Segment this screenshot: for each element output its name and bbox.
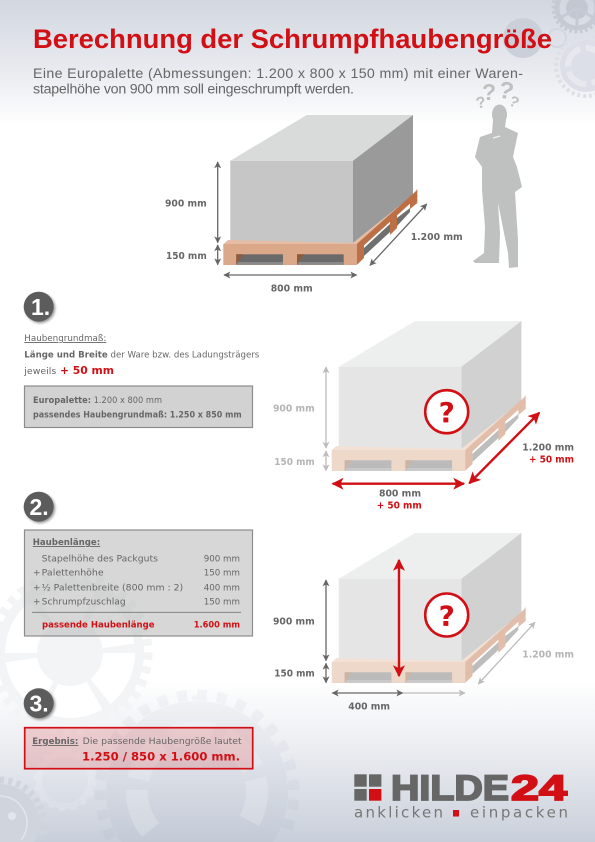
result row: passende Haubenlänge bbox=[42, 621, 154, 631]
dimension labels: step 1: 800 mm bbox=[379, 489, 421, 500]
step 1 text: + 50 mm bbox=[60, 364, 114, 377]
logo tagline bbox=[354, 803, 568, 821]
dimension arrows: overview bbox=[218, 162, 427, 275]
icon: question mark circle step 1 bbox=[425, 390, 468, 433]
dimension labels: step 1: + 50 mm bbox=[377, 501, 422, 512]
red height arrow: step 2 bbox=[398, 560, 400, 676]
background gears bottom left bbox=[0, 575, 294, 842]
step 2 calculation box bbox=[24, 530, 252, 636]
red arrows: step 1 bbox=[333, 413, 539, 484]
intro text bbox=[33, 66, 523, 98]
pallet illustration: step 2 (faded) bbox=[332, 533, 526, 683]
dimension labels: overview: 1.200 mm bbox=[411, 232, 463, 243]
calculation rows: 900 mm bbox=[204, 555, 240, 565]
pallet illustration: overview bbox=[223, 115, 417, 265]
dimension labels: overview: 900 mm bbox=[165, 199, 207, 210]
step 1 text: Länge und Breite der Ware bzw. des Ladungsträgers bbox=[24, 351, 260, 361]
result box: Ergebnis: bbox=[32, 737, 78, 747]
step badge 3: 3. bbox=[30, 690, 49, 716]
calculation rows: 400 mm bbox=[204, 584, 240, 594]
dimension arrows: step 2 bbox=[326, 580, 535, 693]
calculation rows: Palettenhöhe bbox=[42, 569, 104, 579]
icon: question mark circle step 1: ? bbox=[439, 396, 455, 429]
question marks: ? bbox=[475, 94, 487, 113]
question marks bbox=[475, 76, 522, 113]
dimension labels: step 2: 150 mm bbox=[274, 669, 315, 680]
calculation rows: ½ Palettenbreite (800 mm : 2) bbox=[42, 584, 183, 594]
icon: thinking man silhouette bbox=[473, 76, 522, 268]
question marks: ? bbox=[482, 79, 496, 105]
question marks: ? bbox=[496, 76, 516, 106]
result box: Die passende Haubengröße lautet bbox=[83, 737, 242, 747]
step 1 info box bbox=[24, 386, 252, 428]
logo mark bbox=[354, 774, 381, 801]
logo wordmark: HILDE bbox=[391, 769, 509, 808]
background gears top right bbox=[503, 0, 595, 96]
dimension labels: step 2: 1.200 mm bbox=[522, 650, 574, 661]
dimension labels: step 1: + 50 mm bbox=[529, 455, 574, 466]
box heading: Haubenlänge: bbox=[33, 538, 100, 548]
icon: question mark circle step 2: ? bbox=[439, 599, 455, 632]
dimension labels: step 2: 400 mm bbox=[348, 701, 390, 712]
calculation rows: + bbox=[33, 598, 41, 608]
dimension labels: step 2: 900 mm bbox=[273, 617, 315, 628]
calculation rows: + bbox=[33, 569, 41, 579]
logo wordmark bbox=[391, 769, 568, 808]
calculation rows: Schrumpfzuschlag bbox=[42, 598, 126, 608]
result box: 1.250 / 850 x 1.600 mm. bbox=[82, 749, 240, 763]
grey dimension arrows: step 1 bbox=[325, 367, 327, 471]
step 1 text: jeweils bbox=[23, 367, 57, 377]
calculation rows: 150 mm bbox=[204, 569, 240, 579]
logo tagline: anklicken bbox=[354, 803, 443, 821]
pallet illustration: step 1 (faded) bbox=[332, 321, 526, 471]
step badge 1: 1. bbox=[31, 294, 50, 320]
step 1 text bbox=[23, 334, 260, 377]
intro text: stapelhöhe von 900 mm soll eingeschrumpft werden. bbox=[33, 82, 354, 98]
dimension labels: step 1: 1.200 mm bbox=[522, 443, 574, 454]
result box bbox=[25, 728, 253, 769]
step badge 1 bbox=[24, 292, 54, 322]
question marks: ? bbox=[506, 93, 522, 112]
step badge 2 bbox=[24, 492, 54, 522]
dimension labels: overview: 800 mm bbox=[271, 284, 313, 295]
calculation rows bbox=[33, 555, 240, 608]
calculation rows: 150 mm bbox=[204, 598, 240, 608]
dimension labels: step 1 bbox=[273, 404, 574, 512]
logo wordmark: 24 bbox=[511, 769, 568, 808]
logo: HILDE24 bbox=[354, 769, 568, 821]
result row bbox=[42, 621, 240, 631]
calculation rows: Stapelhöhe des Packguts bbox=[42, 555, 158, 565]
dimension labels: step 1: 150 mm bbox=[274, 457, 315, 468]
intro text: Eine Europalette (Abmessungen: 1.200 x 800 x 150 mm) mit einer Waren- bbox=[33, 66, 523, 82]
step 1 text: Haubengrundmaß: bbox=[24, 334, 106, 344]
step badge 3 bbox=[24, 688, 54, 718]
dimension labels: step 1: 900 mm bbox=[273, 404, 315, 415]
result row: 1.600 mm bbox=[194, 621, 240, 631]
icon: question mark circle step 2 bbox=[425, 594, 468, 636]
title: Berechnung der Schrumpfhaubengröße bbox=[33, 24, 552, 54]
dimension labels: overview bbox=[165, 199, 463, 295]
dimension labels: overview: 150 mm bbox=[166, 251, 207, 262]
dimension labels: step 2 bbox=[273, 617, 574, 712]
step 1 info box: Europalette: 1.200 x 800 mm bbox=[33, 396, 162, 406]
logo tagline: einpacken bbox=[470, 803, 568, 821]
step 1 info box: passendes Haubengrundmaß: 1.250 x 850 mm bbox=[33, 411, 242, 421]
calculation rows: + bbox=[33, 584, 41, 594]
step badge 2: 2. bbox=[30, 494, 49, 520]
